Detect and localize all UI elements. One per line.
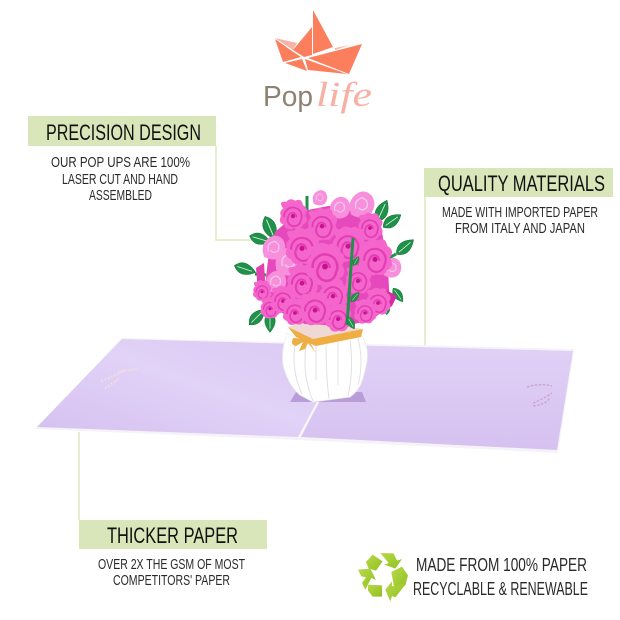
fold line <box>299 400 319 438</box>
panel: precision design <box>28 116 252 240</box>
green stem <box>344 238 361 331</box>
panel: thicker paper <box>79 432 267 589</box>
body text <box>98 557 245 589</box>
foil signature left <box>101 368 139 388</box>
body text: FROM ITALY AND JAPAN <box>455 221 585 237</box>
panel: quality materials <box>424 168 613 346</box>
icon: origami boat <box>275 10 362 74</box>
card right panel <box>301 345 573 450</box>
pop-up bouquet <box>233 190 417 402</box>
wordmark: Pop: Pop <box>263 81 313 113</box>
foil signature right <box>527 385 552 406</box>
recycling text <box>413 555 588 599</box>
pop-up card <box>35 338 574 453</box>
logo: Poplife <box>263 10 372 114</box>
icon: recycle <box>358 553 408 601</box>
vase <box>282 333 368 402</box>
connector line <box>424 197 426 346</box>
heading bar <box>28 116 216 146</box>
vase rim and ribbon <box>288 327 363 353</box>
body text <box>442 205 598 237</box>
body text: OUR POP UPS ARE 100% <box>51 155 190 171</box>
body text: COMPETITORS' PAPER <box>113 573 230 589</box>
wordmark: life: life <box>316 75 372 114</box>
body text: OVER 2X THE GSM OF MOST <box>98 557 245 573</box>
vase rim interior <box>288 320 363 340</box>
body text: ASSEMBLED <box>89 188 152 204</box>
heading bar <box>79 520 267 549</box>
card white edge <box>35 338 574 453</box>
card left panel <box>37 339 318 437</box>
outer pale petals <box>256 190 401 312</box>
body text <box>51 155 190 204</box>
roses <box>253 199 392 332</box>
heading bar <box>424 168 613 197</box>
connector line <box>78 432 80 520</box>
body text: LASER CUT AND HAND <box>62 172 178 188</box>
heading: PRECISION DESIGN <box>46 120 201 145</box>
heading: THICKER PAPER <box>107 523 238 548</box>
connector line <box>216 146 252 240</box>
panel: recyclable <box>358 553 588 601</box>
leaves <box>233 196 417 332</box>
flower mass <box>264 206 390 326</box>
vase shadow <box>290 392 366 402</box>
